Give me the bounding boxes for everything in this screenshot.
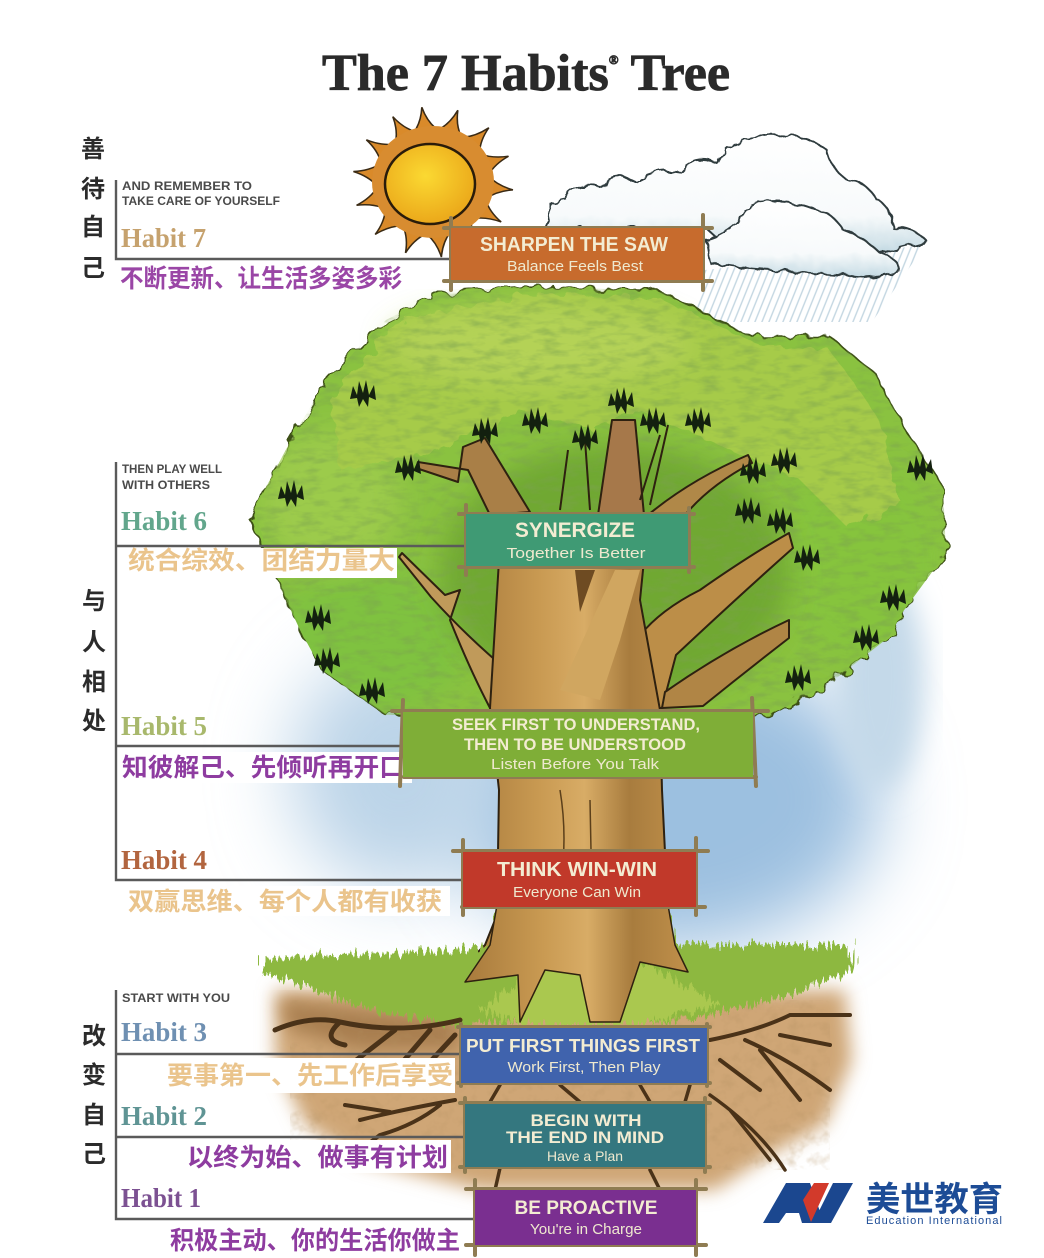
sign: sharpen the saw: SHARPEN THE SAW	[480, 234, 668, 256]
sign: put first things first	[458, 1024, 710, 1086]
soil dark band	[280, 1000, 460, 1050]
branch: right large limb	[620, 533, 793, 708]
sky background	[290, 570, 925, 950]
branch: thin left twigs	[560, 425, 668, 510]
white text backings	[120, 548, 455, 1173]
title: Tree	[619, 45, 730, 102]
text: take care of yourself: TAKE CARE OF YOURSELF	[122, 194, 280, 208]
logo chinese name: 美世教育	[866, 1181, 1003, 1219]
habit 2 chinese: 以终为始、做事有计划	[187, 1144, 448, 1172]
habit 4 chinese: 双赢思维、每个人都有收获	[128, 888, 442, 916]
vertical label: 与人相处: 人	[82, 629, 106, 656]
title: ®	[609, 52, 619, 67]
branch: upper left limb	[416, 438, 530, 515]
branch: center limb	[598, 420, 644, 515]
sign: think win-win	[453, 838, 708, 915]
sign: put first things first: PUT FIRST THINGS FIRST	[466, 1036, 700, 1056]
vertical label: 改变自己: 自	[82, 1102, 106, 1129]
grass	[264, 915, 855, 1025]
trunk upper	[462, 560, 685, 1025]
tree trunk and branches	[399, 420, 793, 1025]
branch: lower left limb	[399, 553, 530, 708]
habit 5 chinese: 知彼解己、先倾听再开口	[122, 754, 405, 782]
habit 2 label: Habit 2	[121, 1101, 207, 1131]
habit 7 label: Habit 7	[121, 223, 206, 253]
roots	[275, 1015, 850, 1190]
text: play well with others: WITH OTHERS	[122, 478, 210, 492]
vertical label: 善待自己: 善	[81, 136, 105, 163]
soil	[275, 990, 852, 1190]
vertical label: 善待自己: 自	[81, 214, 105, 241]
sign: sharpen the saw	[444, 215, 712, 290]
habit 5 label: Habit 5	[121, 711, 207, 741]
habit 7 chinese: 不断更新、让生活多姿多彩	[120, 265, 402, 293]
vertical label: 改变自己: 变	[82, 1061, 106, 1089]
canopy texture	[250, 285, 950, 715]
dark leaf clusters	[278, 380, 933, 704]
sign: begin with the end in mind: THE END IN MIND	[506, 1128, 664, 1147]
sign: begin with the end in mind: BEGIN WITH	[530, 1111, 642, 1130]
sign: seek first to understand	[392, 698, 768, 786]
branch: lower right limb	[662, 620, 789, 708]
crown interior shade	[440, 445, 790, 705]
sign: put first things first: Work First, Then Play	[508, 1059, 661, 1076]
vertical label: 与人相处: 相	[82, 669, 106, 696]
sign: synergize: Together Is Better	[506, 545, 646, 562]
text: take care of yourself	[122, 179, 280, 208]
sign: think win-win: THINK WIN-WIN	[497, 859, 657, 881]
vertical label: 改变自己	[82, 1023, 106, 1168]
sign: begin with the end in mind: Have a Plan	[547, 1148, 623, 1164]
vertical label: 与人相处	[82, 588, 106, 735]
vertical label: 改变自己: 己	[82, 1141, 106, 1168]
sign: synergize	[459, 505, 694, 575]
sign: think win-win: Everyone Can Win	[513, 884, 641, 901]
vertical label: 与人相处: 与	[82, 588, 106, 615]
logo mark	[763, 1183, 853, 1223]
vertical label: 善待自己: 己	[81, 255, 105, 282]
branch: right upper limb	[648, 455, 752, 515]
icon: rain	[690, 245, 925, 322]
sign: begin with the end in mind	[460, 1098, 710, 1172]
sign: seek first to understand: Listen Before You Talk	[491, 756, 660, 773]
vertical label: 与人相处: 处	[82, 708, 106, 735]
text: play well with others	[122, 462, 222, 492]
trunk base over grass	[465, 905, 688, 1022]
vertical label: 改变自己: 改	[82, 1023, 106, 1050]
habit 3 chinese: 要事第一、先工作后享受	[167, 1062, 453, 1090]
text: start with you: START WITH YOU	[122, 991, 230, 1005]
icon: clouds	[547, 134, 927, 277]
sign: be proactive: You're in Charge	[530, 1221, 642, 1238]
habit 1 chinese: 积极主动、你的生活你做主	[170, 1227, 460, 1255]
text: take care of yourself: AND REMEMBER TO	[122, 179, 252, 193]
logo: Education International	[763, 1181, 1003, 1227]
vertical label: 善待自己: 待	[81, 176, 105, 203]
leader lines	[116, 180, 476, 1219]
logo english name: Education International	[866, 1215, 1002, 1227]
icon: sun	[352, 106, 514, 258]
habit 1 label: Habit 1	[121, 1183, 201, 1213]
text: play well with others: THEN PLAY WELL	[122, 462, 222, 476]
sign: synergize: SYNERGIZE	[515, 519, 635, 542]
title: The 7 Habits	[322, 45, 608, 102]
soil texture	[290, 1000, 830, 1170]
habit 6 label: Habit 6	[121, 506, 207, 536]
tree crown	[250, 285, 950, 715]
canopy highlight	[390, 305, 690, 385]
upper canopy	[330, 295, 900, 530]
sign: seek first to understand: SEEK FIRST TO UNDERSTAND,	[452, 715, 700, 734]
sign: sharpen the saw: Balance Feels Best	[507, 258, 644, 275]
sign: be proactive: BE PROACTIVE	[514, 1198, 658, 1219]
habit 3 label: Habit 3	[121, 1017, 207, 1047]
vertical label: 善待自己	[81, 136, 105, 282]
trunk diagonal limb	[560, 570, 640, 700]
sign: be proactive	[466, 1180, 706, 1255]
sign: seek first to understand: THEN TO BE UNDERSTOOD	[464, 735, 686, 754]
habit 6 chinese: 统合综效、团结力量大	[128, 547, 395, 575]
habit 4 label: Habit 4	[121, 845, 207, 875]
